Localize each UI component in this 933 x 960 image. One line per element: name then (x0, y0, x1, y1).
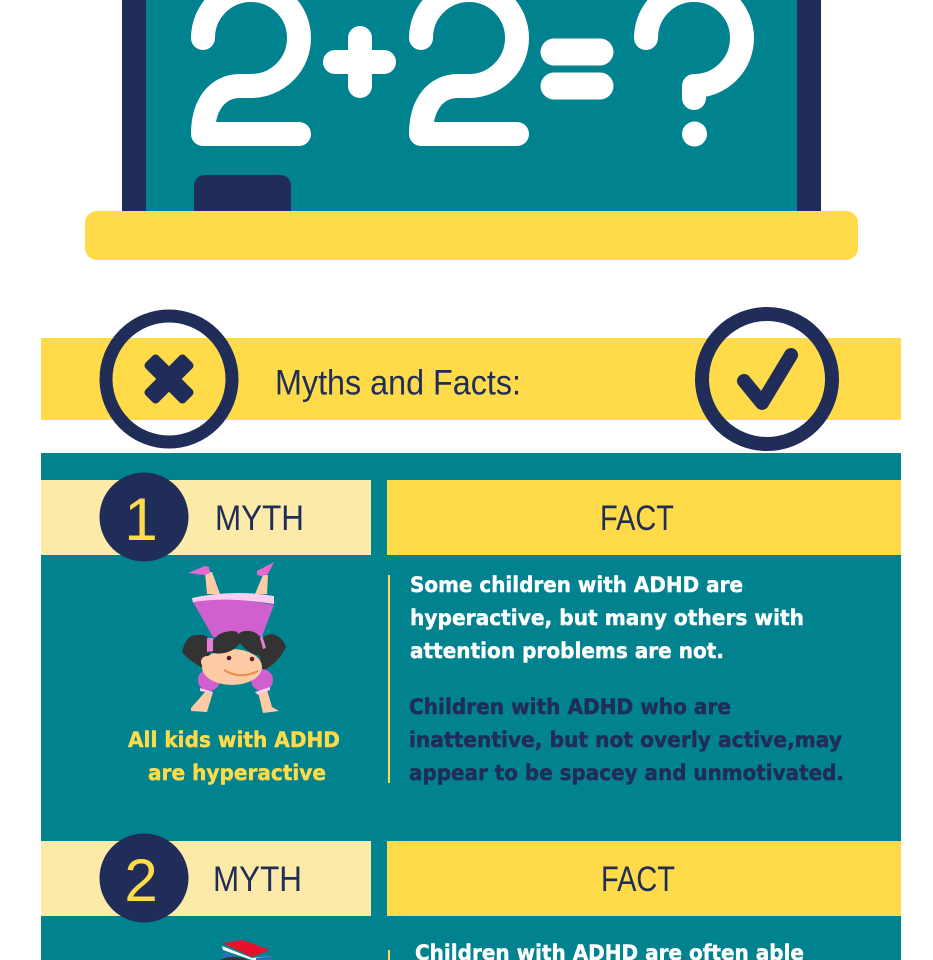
illustration: stack of books (218, 940, 271, 960)
divider (388, 575, 390, 783)
fact 1 white text (410, 573, 804, 664)
myth 1 text: are hyperactive (148, 761, 326, 786)
banner: myths and facts (41, 314, 901, 444)
row 2 header: 2 (124, 847, 158, 914)
row 2 header (41, 834, 901, 922)
fact 1 navy text (409, 695, 844, 786)
icon: check in circle (702, 314, 832, 444)
fact 1 white text: Some children with ADHD are (410, 573, 743, 598)
row 1 header: MYTH (215, 499, 304, 538)
myth 1 text: All kids with ADHD (128, 728, 340, 753)
chalk tray (85, 211, 858, 260)
illustration: girl doing handstand (182, 562, 286, 713)
chalkboard (85, 0, 858, 260)
row 1 header (41, 472, 901, 562)
row 1 header: 1 (124, 486, 158, 553)
fact 1 navy text: inattentive, but not overly active,may (409, 728, 842, 753)
row 1 header: FACT (600, 499, 674, 538)
divider (388, 950, 390, 960)
fact 1 white text: attention problems are not. (410, 639, 724, 664)
eraser (194, 175, 291, 212)
banner heading: Myths and Facts: (275, 364, 521, 402)
myth 1 text (128, 728, 340, 786)
fact 1 navy text: appear to be spacey and unmotivated. (409, 761, 844, 786)
icon: cross in circle (106, 316, 232, 442)
fact 1 navy text: Children with ADHD who are (409, 695, 731, 720)
row 2 header: FACT (601, 860, 675, 899)
row 2 header: MYTH (213, 860, 302, 899)
fact 1 white text: hyperactive, but many others with (410, 606, 804, 631)
teal content panel (41, 453, 901, 960)
equation: 2+2=? (203, 0, 742, 146)
